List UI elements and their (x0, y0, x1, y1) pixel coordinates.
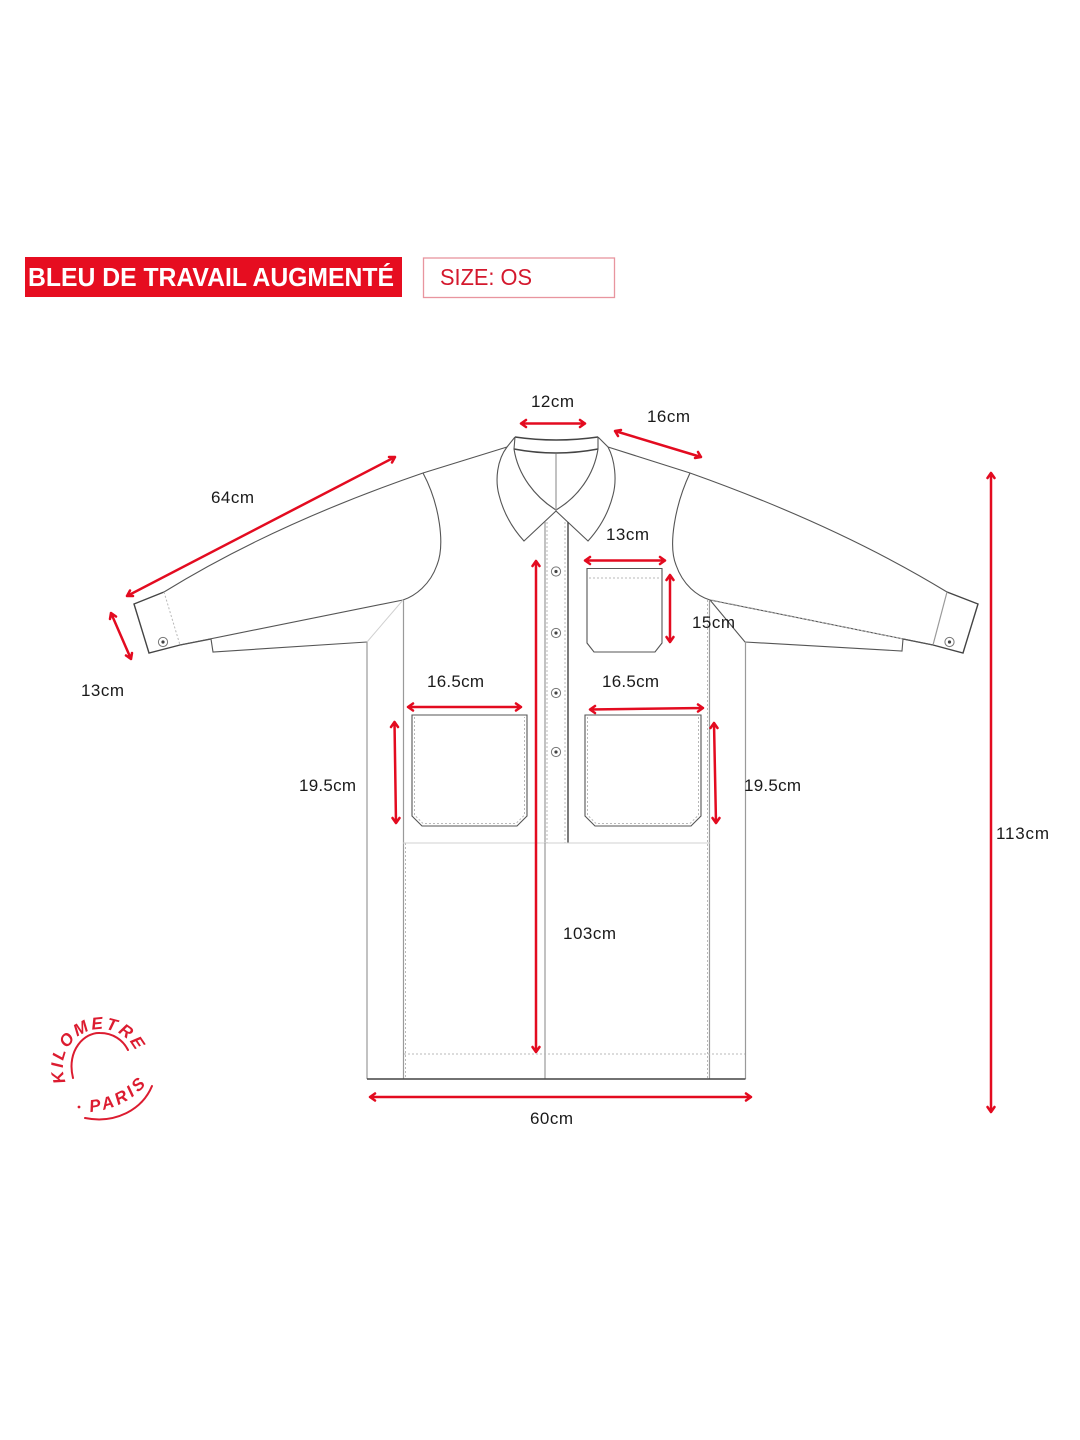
logo: Kilometre Paris: KILOMETRE (51, 1016, 146, 1082)
measure: chest pocket height 15cm (666, 575, 735, 642)
measure: cuff 13cm (81, 613, 132, 700)
measure: sleeve 64cm: 64cm (211, 488, 254, 507)
measure: right pocket height 19.5cm: 19.5cm (744, 776, 801, 795)
measure: left pocket width 16.5cm: 16.5cm (427, 672, 484, 691)
placket (545, 522, 568, 843)
measure: left pocket height 19.5cm (299, 722, 400, 823)
measure: right pocket width 16.5cm (590, 672, 703, 713)
chest pocket (587, 568, 662, 652)
shirt body (367, 600, 746, 1079)
measure: cuff 13cm: 13cm (81, 681, 124, 700)
measure: total length 113cm (988, 473, 1049, 1112)
size box (424, 258, 614, 298)
logo: Kilometre Paris (51, 1016, 153, 1120)
measure: collar 12cm: 12cm (531, 392, 574, 411)
measure: front length 103cm (532, 561, 616, 1052)
left sleeve (134, 447, 507, 653)
left lower pocket (412, 715, 527, 826)
logo: Kilometre Paris: PARIS (90, 1078, 144, 1112)
right sleeve (608, 447, 978, 653)
measure: total length 113cm: 113cm (996, 824, 1049, 843)
measure: right pocket height 19.5cm (710, 723, 801, 823)
buttons (158, 567, 954, 757)
shirt technical drawing (134, 437, 978, 1079)
measure: right pocket width 16.5cm: 16.5cm (602, 672, 659, 691)
measure: sleeve 64cm (127, 457, 395, 596)
measure: left pocket height 19.5cm: 19.5cm (299, 776, 356, 795)
measure: shoulder 16cm (615, 407, 701, 458)
measure: width 60cm (370, 1094, 751, 1128)
title: garment name: BLEU DE TRAVAIL AUGMENTÉ (28, 262, 394, 292)
measure: collar 12cm (521, 392, 585, 427)
collar (497, 437, 615, 541)
measure: chest pocket width 13cm (585, 525, 665, 564)
measure: left pocket width 16.5cm (408, 672, 521, 710)
measure: chest pocket width 13cm: 13cm (606, 525, 649, 544)
measure: chest pocket height 15cm: 15cm (692, 613, 735, 632)
measure: front length 103cm: 103cm (563, 924, 616, 943)
right lower pocket (585, 715, 701, 826)
measure: shoulder 16cm: 16cm (647, 407, 690, 426)
size box: SIZE: OS (440, 264, 532, 290)
measure: width 60cm: 60cm (530, 1109, 573, 1128)
